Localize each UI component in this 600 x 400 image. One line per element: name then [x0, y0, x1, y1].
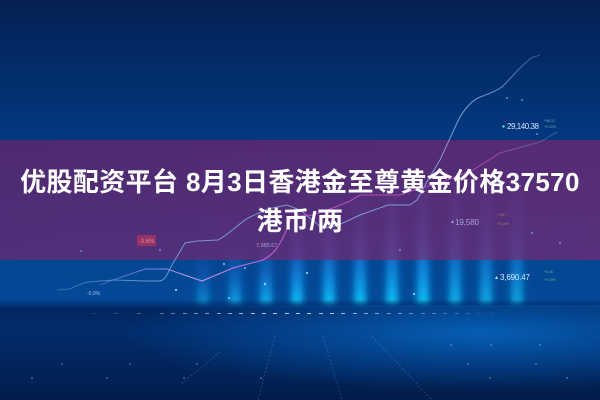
tag: red percentage badge: [137, 235, 156, 246]
label: 19,580: +0.14%: [497, 222, 509, 226]
sparkle dots: [80, 97, 561, 299]
tag: red percentage badge: -3.6%: [139, 239, 155, 245]
chart line: light blue index: [57, 55, 540, 290]
label: 29,140.38: +58.32: [544, 119, 555, 123]
label: 19,580: +26.7: [498, 213, 507, 217]
label: 29,140.38: 29,140.38: [507, 122, 540, 131]
chart line: magenta index: [100, 132, 557, 285]
title: 港币/两: [257, 206, 343, 236]
label: 3,690.47: [495, 270, 556, 282]
label: 0.0 percent: -0.0%: [87, 291, 101, 297]
label: 7,985.67: 7,985.67: [256, 243, 277, 249]
label: 3,690.47: +0.09%: [544, 278, 556, 282]
label: 19,580: 19,580: [455, 218, 480, 227]
purple translucent title band: [0, 140, 600, 260]
label: 19,580: [451, 213, 509, 227]
title: [20, 167, 580, 236]
label: 3,690.47: 3,690.47: [500, 273, 531, 282]
label: 29,140.38: +0.20%: [544, 125, 556, 129]
title: 优股配资平台 8月3日香港金至尊黄金价格37570: [20, 167, 580, 197]
label: 29,140.38: [502, 119, 556, 131]
label: 3,690.47: +3.16: [544, 270, 553, 274]
